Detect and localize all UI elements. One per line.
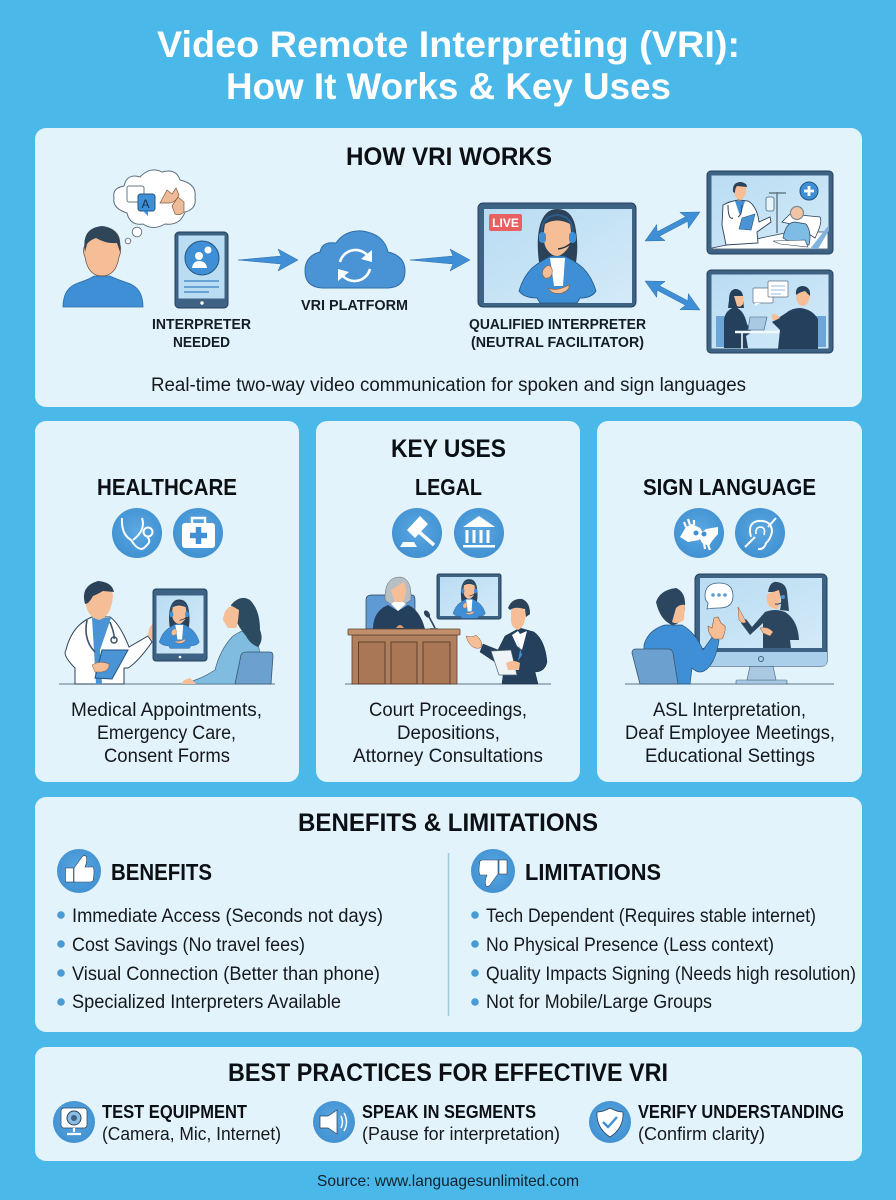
panel: benefits and limitations bbox=[35, 797, 862, 1032]
icon: hearing ear bbox=[735, 508, 785, 558]
text: legal uses bbox=[353, 700, 543, 767]
arrow: two-way top bbox=[645, 212, 700, 241]
text: legal uses: Court Proceedings, bbox=[369, 700, 527, 721]
icon: gavel bbox=[392, 508, 442, 558]
list: limitations: No Physical Presence (Less context) bbox=[486, 935, 774, 956]
label: interpreter needed: INTERPRETER bbox=[152, 317, 251, 333]
text: legal uses: Depositions, bbox=[397, 723, 500, 744]
list: benefits: Visual Connection (Better than phone) bbox=[72, 964, 380, 985]
text: test equipment: (Camera, Mic, Internet) bbox=[102, 1124, 281, 1144]
panel: sign language bbox=[597, 421, 862, 782]
icon: thumbs up bbox=[57, 849, 101, 893]
heading: benefits and limitations: BENEFITS & LIMITATIONS bbox=[298, 809, 598, 837]
text: test equipment: TEST EQUIPMENT bbox=[102, 1102, 247, 1122]
title: Video Remote Interpreting (VRI): bbox=[157, 24, 740, 65]
panel: legal bbox=[316, 421, 580, 782]
arrow: to platform bbox=[238, 249, 298, 271]
text: healthcare uses: Medical Appointments, bbox=[71, 700, 262, 721]
list: limitations bbox=[471, 906, 856, 1013]
icon: stethoscope bbox=[112, 508, 162, 558]
icon: cloud platform bbox=[305, 231, 405, 288]
text: verify understanding: (Confirm clarity) bbox=[638, 1124, 765, 1144]
label: qualified interpreter: QUALIFIED INTERPRETER bbox=[469, 317, 647, 333]
heading: key uses: KEY USES bbox=[391, 435, 506, 463]
list: limitations: Quality Impacts Signing (Needs high resolution) bbox=[486, 964, 856, 985]
text: healthcare uses: Consent Forms bbox=[104, 746, 230, 767]
list: benefits: Cost Savings (No travel fees) bbox=[72, 935, 305, 956]
source line: Source: www.languagesunlimited.com bbox=[317, 1173, 579, 1190]
text: healthcare uses bbox=[71, 700, 262, 767]
label: interpreter needed bbox=[152, 317, 251, 351]
text: verify understanding bbox=[638, 1102, 844, 1144]
text: healthcare uses: Emergency Care, bbox=[97, 723, 236, 744]
icon: thought bubble bbox=[114, 170, 195, 244]
monitor: live interpreter: LIVE bbox=[492, 216, 519, 230]
heading: legal: LEGAL bbox=[415, 474, 482, 500]
panel: best practices bbox=[35, 1047, 862, 1161]
monitor: live interpreter bbox=[478, 203, 636, 307]
heading: best practices: BEST PRACTICES FOR EFFECTIVE VRI bbox=[228, 1059, 668, 1087]
heading: limitations: LIMITATIONS bbox=[525, 859, 661, 885]
text: sign language uses: Educational Settings bbox=[645, 746, 815, 767]
list: limitations: Tech Dependent (Requires stable internet) bbox=[486, 906, 816, 927]
icon: speaker bbox=[313, 1101, 355, 1143]
title: How It Works & Key Uses bbox=[226, 66, 671, 107]
scene: hospital screen bbox=[707, 171, 833, 254]
text: test equipment bbox=[102, 1102, 281, 1144]
icon: tablet bbox=[175, 232, 228, 308]
text: sign language uses: ASL Interpretation, bbox=[653, 700, 806, 721]
panel: healthcare bbox=[35, 421, 299, 782]
heading: healthcare: HEALTHCARE bbox=[97, 474, 237, 500]
text: sign language uses: Deaf Employee Meetings, bbox=[625, 723, 835, 744]
arrow: two-way bottom bbox=[645, 281, 700, 310]
text: legal uses: Attorney Consultations bbox=[353, 746, 543, 767]
icon: thought bubble: A bbox=[142, 197, 150, 211]
heading: how VRI works: HOW VRI WORKS bbox=[346, 143, 552, 171]
text: speak in segments bbox=[362, 1102, 560, 1144]
illustration: doctor with tablet and patient bbox=[59, 581, 275, 684]
heading: benefits: BENEFITS bbox=[111, 859, 212, 885]
text: speak in segments: (Pause for interpretation) bbox=[362, 1124, 560, 1144]
text: verify understanding: VERIFY UNDERSTANDING bbox=[638, 1102, 844, 1122]
icon: shield check bbox=[589, 1101, 631, 1143]
title bbox=[157, 24, 740, 107]
list: benefits bbox=[57, 906, 383, 1013]
label: VRI platform: VRI PLATFORM bbox=[301, 298, 408, 314]
label: qualified interpreter bbox=[469, 317, 647, 351]
list: benefits: Immediate Access (Seconds not days) bbox=[72, 906, 383, 927]
icon: person with question bbox=[63, 226, 143, 307]
label: qualified interpreter: (NEUTRAL FACILITATOR) bbox=[471, 335, 644, 351]
icon: first aid kit bbox=[173, 508, 223, 558]
panel: how VRI works bbox=[35, 128, 862, 407]
list: benefits: Specialized Interpreters Available bbox=[72, 992, 341, 1013]
label: interpreter needed: NEEDED bbox=[173, 335, 230, 351]
text: speak in segments: SPEAK IN SEGMENTS bbox=[362, 1102, 536, 1122]
list: limitations: Not for Mobile/Large Groups bbox=[486, 992, 712, 1013]
heading: sign language: SIGN LANGUAGE bbox=[643, 474, 816, 500]
icon: signing hands bbox=[674, 508, 724, 558]
caption: real-time: Real-time two-way video communication for spoken and sign languages bbox=[151, 375, 746, 396]
illustration: video call bbox=[625, 574, 834, 684]
icon: courthouse bbox=[454, 508, 504, 558]
scene: business meeting screen bbox=[707, 270, 833, 353]
icon: thumbs down bbox=[471, 849, 515, 893]
text: sign language uses bbox=[625, 700, 835, 767]
icon: camera bbox=[53, 1101, 95, 1143]
illustration: courtroom bbox=[345, 574, 551, 684]
arrow: to interpreter bbox=[410, 249, 470, 271]
